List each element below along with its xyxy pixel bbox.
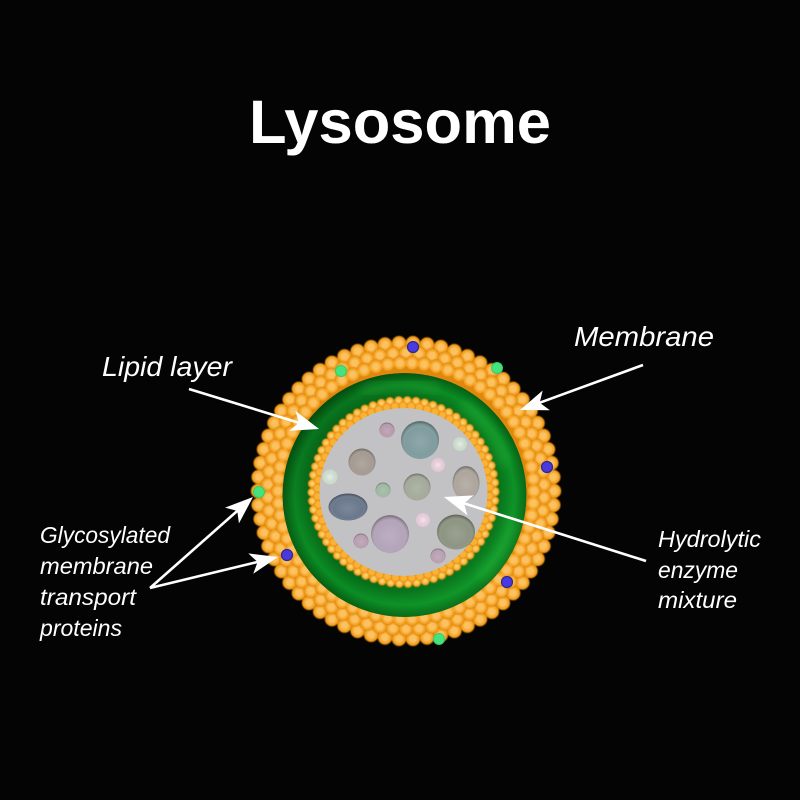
lipid layer: green ring	[282, 373, 526, 617]
arrow: Hydrolytic enzyme mixture	[452, 499, 646, 561]
arrows: transport proteins	[150, 502, 270, 588]
label: Hydrolytic enzyme mixture: mixture	[658, 587, 737, 613]
vesicle: pale green glow right	[453, 437, 467, 451]
arrow: Lipid layer	[189, 389, 311, 427]
vesicle: pink glow upper	[431, 458, 445, 472]
label: Glycosylated membrane transport proteins: transport	[40, 584, 138, 610]
vesicle: pale green glow left	[322, 470, 338, 484]
vesicle: small pink right	[430, 548, 446, 564]
vesicle: small green	[376, 482, 390, 498]
lysosome diagram	[254, 342, 554, 644]
vesicle: olive centre	[404, 474, 430, 500]
inner membrane: small orange beads	[312, 400, 496, 584]
vesicle: slate blue oval	[328, 494, 368, 520]
label: Glycosylated membrane transport proteins: Glycosylated	[40, 522, 171, 548]
label: Membrane: Membrane	[574, 321, 714, 352]
outer membrane: orange bead layer	[258, 343, 554, 639]
vesicle: brown	[348, 448, 376, 476]
arrow: Membrane	[528, 365, 643, 407]
label: Glycosylated membrane transport proteins: membrane	[40, 553, 153, 579]
vesicle: olive large	[437, 514, 475, 550]
label: Glycosylated membrane transport proteins: proteins	[39, 615, 122, 641]
hydrolytic enzyme vesicles	[322, 421, 480, 564]
vesicle: purple	[371, 515, 409, 553]
enzyme mixture: grey lumen	[320, 408, 488, 576]
vesicle: pink glow lower	[416, 513, 430, 527]
title: Lysosome	[249, 88, 551, 156]
label: Hydrolytic enzyme mixture: Hydrolytic	[658, 526, 761, 552]
transport proteins: green	[254, 362, 502, 644]
vesicle: teal	[401, 421, 439, 459]
transport proteins: blue	[282, 342, 552, 588]
vesicle: tan oval	[452, 466, 480, 500]
label: Lipid layer: Lipid layer	[102, 351, 234, 382]
vesicle: small pink left	[354, 534, 368, 548]
label: Hydrolytic enzyme mixture: enzyme	[658, 557, 738, 583]
vesicle: small pink top	[380, 422, 394, 438]
